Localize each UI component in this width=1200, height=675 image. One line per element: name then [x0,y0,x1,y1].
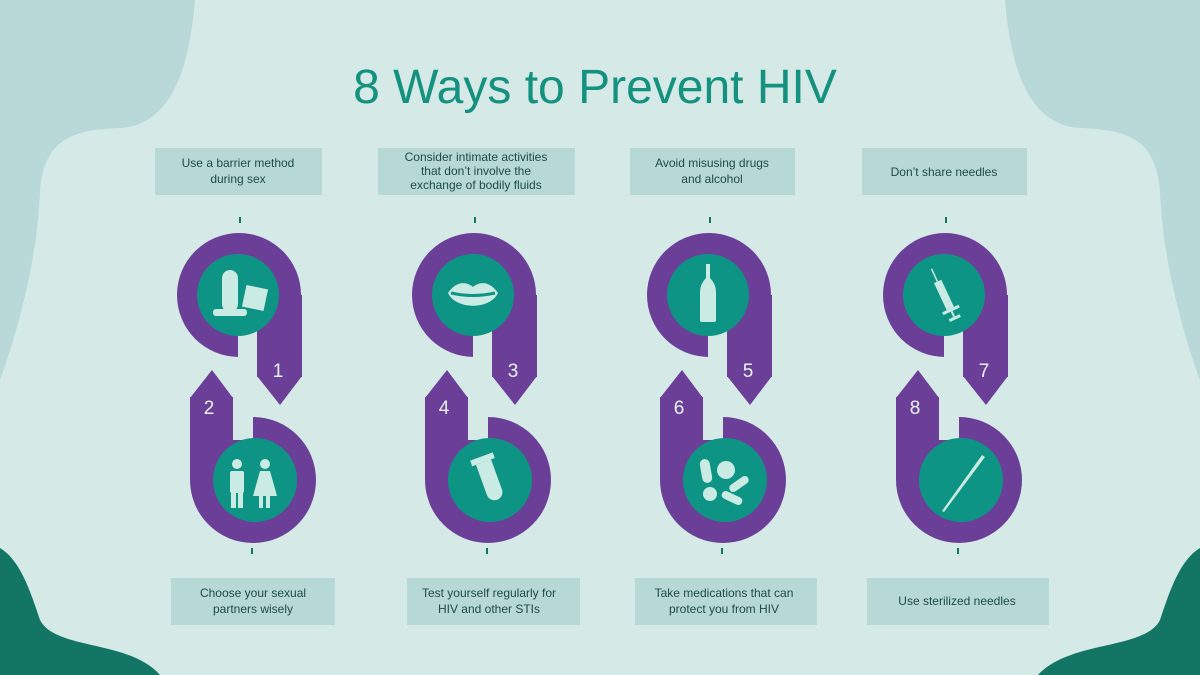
label: step 8: Use sterilized needles [898,594,1016,608]
column 3: steps 5-6 [647,217,786,554]
label: step 3: that don’t involve the [421,164,531,178]
title: 8 Ways to Prevent HIV [353,61,837,114]
label: step 1: Use a barrier method [182,156,294,170]
column 3: steps 5-6: 6 [674,398,684,419]
label: step 8 [867,578,1049,625]
label: step 6 [635,578,817,625]
label: step 7: Don’t share needles [891,165,997,179]
label: step 6: Take medications that can [655,586,793,600]
label: step 5 [630,148,795,195]
label: step 6: protect you from HIV [669,602,779,616]
label: step 1: during sex [210,172,266,186]
column 4: steps 7-8: 7 [979,361,989,382]
icon: test tube [470,452,508,504]
label: step 2: partners wisely [213,602,293,616]
label: step 4 [407,578,580,625]
label: step 4: Test yourself regularly for [422,586,556,600]
label: step 1 [155,148,322,195]
column 4: steps 7-8: 8 [910,398,920,419]
label: step 2 [171,578,335,625]
icon: condom [213,270,268,316]
icon: pills [699,458,750,506]
background blob: top-left [0,0,195,380]
background blob: top-right [1005,0,1200,380]
column 4: steps 7-8 [883,217,1022,554]
column 1: steps 1-2: 2 [204,398,214,419]
column 2: steps 3-4: 3 [508,361,518,382]
column 2: steps 3-4: 4 [439,398,450,419]
background blob: bottom-right [1038,548,1200,675]
label: step 7 [862,148,1027,195]
background blob: bottom-left [0,548,160,675]
top label boxes [155,148,1049,625]
column 1: steps 1-2 [177,217,316,554]
label: step 5: and alcohol [681,172,743,186]
column 2: steps 3-4 [412,217,551,554]
icon: man and woman [230,459,277,508]
label: step 3: exchange of bodily fluids [410,178,542,192]
icon: bottle [700,264,716,322]
label: step 4: HIV and other STIs [438,602,540,616]
icon: needle [942,455,985,512]
column 1: steps 1-2: 1 [273,361,283,382]
label: step 3: Consider intimate activities [405,150,547,164]
column 3: steps 5-6: 5 [743,361,753,382]
icon: syringe [924,265,964,323]
label: step 5: Avoid misusing drugs [655,156,769,170]
icon: lips [448,283,498,306]
label: step 2: Choose your sexual [200,586,306,600]
label: step 3 [378,148,575,195]
